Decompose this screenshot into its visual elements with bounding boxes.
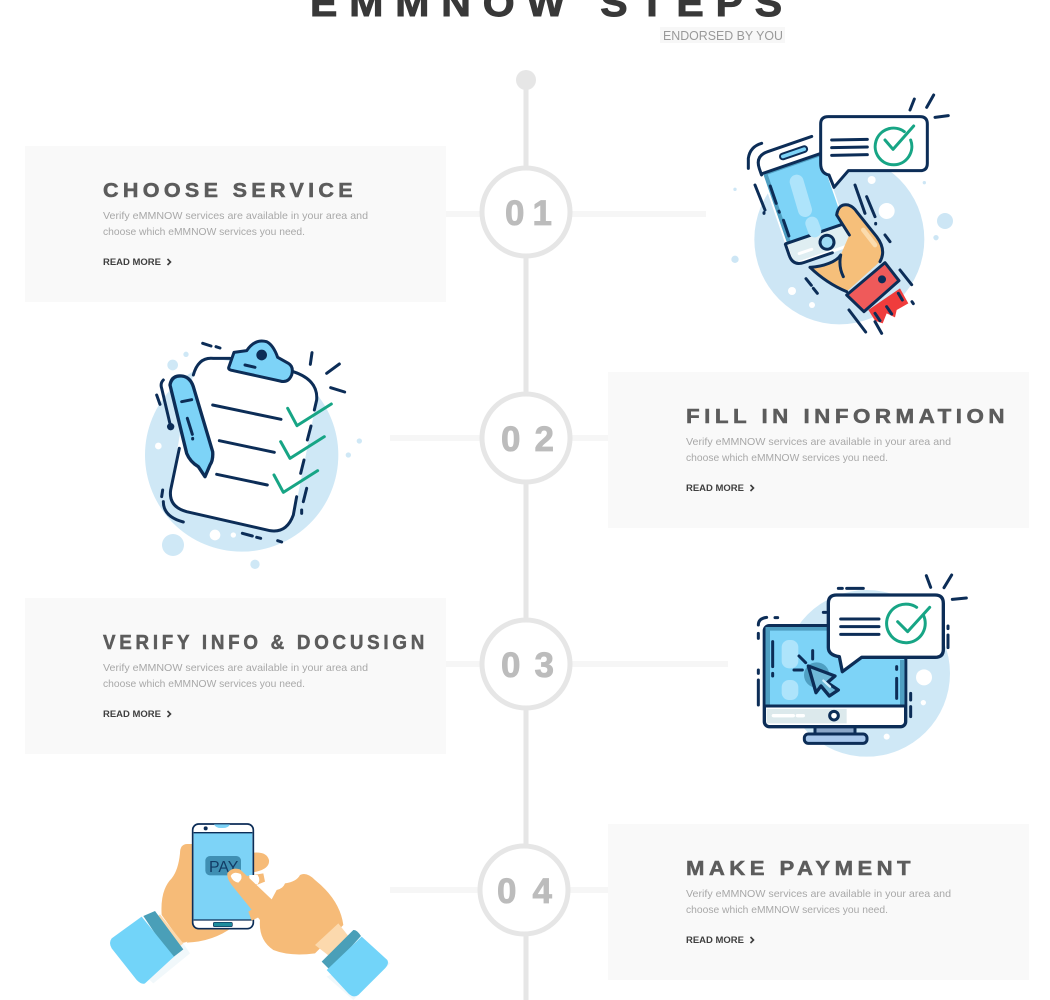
- step 02 number: 02: [501, 420, 554, 459]
- step 02 number: [482, 394, 570, 482]
- icon: desktop monitor with cursor and check bubble: [758, 575, 966, 757]
- step 03 number: [482, 620, 570, 708]
- panel: choose service: Verify eMMNOW services are available in your area and: [103, 210, 368, 222]
- panel: choose service: READ MORE: [103, 257, 161, 268]
- icon: hands paying on phone: PAY: [209, 859, 238, 876]
- panel: make payment: Verify eMMNOW services are available in your area and: [686, 888, 951, 900]
- panel: choose service: [25, 146, 446, 302]
- panel: fill in information: READ MORE: [686, 483, 744, 494]
- icon: hand holding phone with check bubble: [731, 95, 953, 333]
- panel: verify info and docusign: Verify eMMNOW services are available in your area and: [103, 662, 368, 674]
- step 04 number: 04: [497, 872, 553, 911]
- panel: fill in information: Verify eMMNOW services are available in your area and: [686, 436, 951, 448]
- connectors: [390, 211, 728, 893]
- panel: choose service: choose which eMMNOW services you need.: [103, 226, 305, 238]
- step 01 number: 01: [505, 194, 552, 233]
- panel: make payment: [608, 824, 1029, 980]
- step 01 number: [482, 168, 570, 256]
- subtitle badge: ENDORSED BY YOU: [663, 28, 783, 43]
- icon: hands paying on phone: [110, 824, 390, 1000]
- panel: verify info and docusign: READ MORE: [103, 709, 161, 720]
- panel: verify info and docusign: [25, 598, 446, 754]
- panel: make payment: choose which eMMNOW services you need.: [686, 904, 888, 916]
- panel: fill in information: [608, 372, 1029, 528]
- panel: make payment: READ MORE: [686, 935, 744, 946]
- step 04 number: [480, 846, 568, 934]
- panel: fill in information: FILL IN INFORMATION: [686, 406, 1009, 428]
- step 03 number: 03: [501, 646, 554, 685]
- panel: fill in information: choose which eMMNOW services you need.: [686, 452, 888, 464]
- panel: verify info and docusign: choose which eMMNOW services you need.: [103, 678, 305, 690]
- timeline spine: [516, 70, 536, 1000]
- panel: make payment: MAKE PAYMENT: [686, 858, 915, 880]
- panel: verify info and docusign: VERIFY INFO & DOCUSIGN: [103, 632, 428, 654]
- panel: choose service: CHOOSE SERVICE: [103, 180, 357, 202]
- icon: clipboard with pen and checks: [145, 341, 362, 569]
